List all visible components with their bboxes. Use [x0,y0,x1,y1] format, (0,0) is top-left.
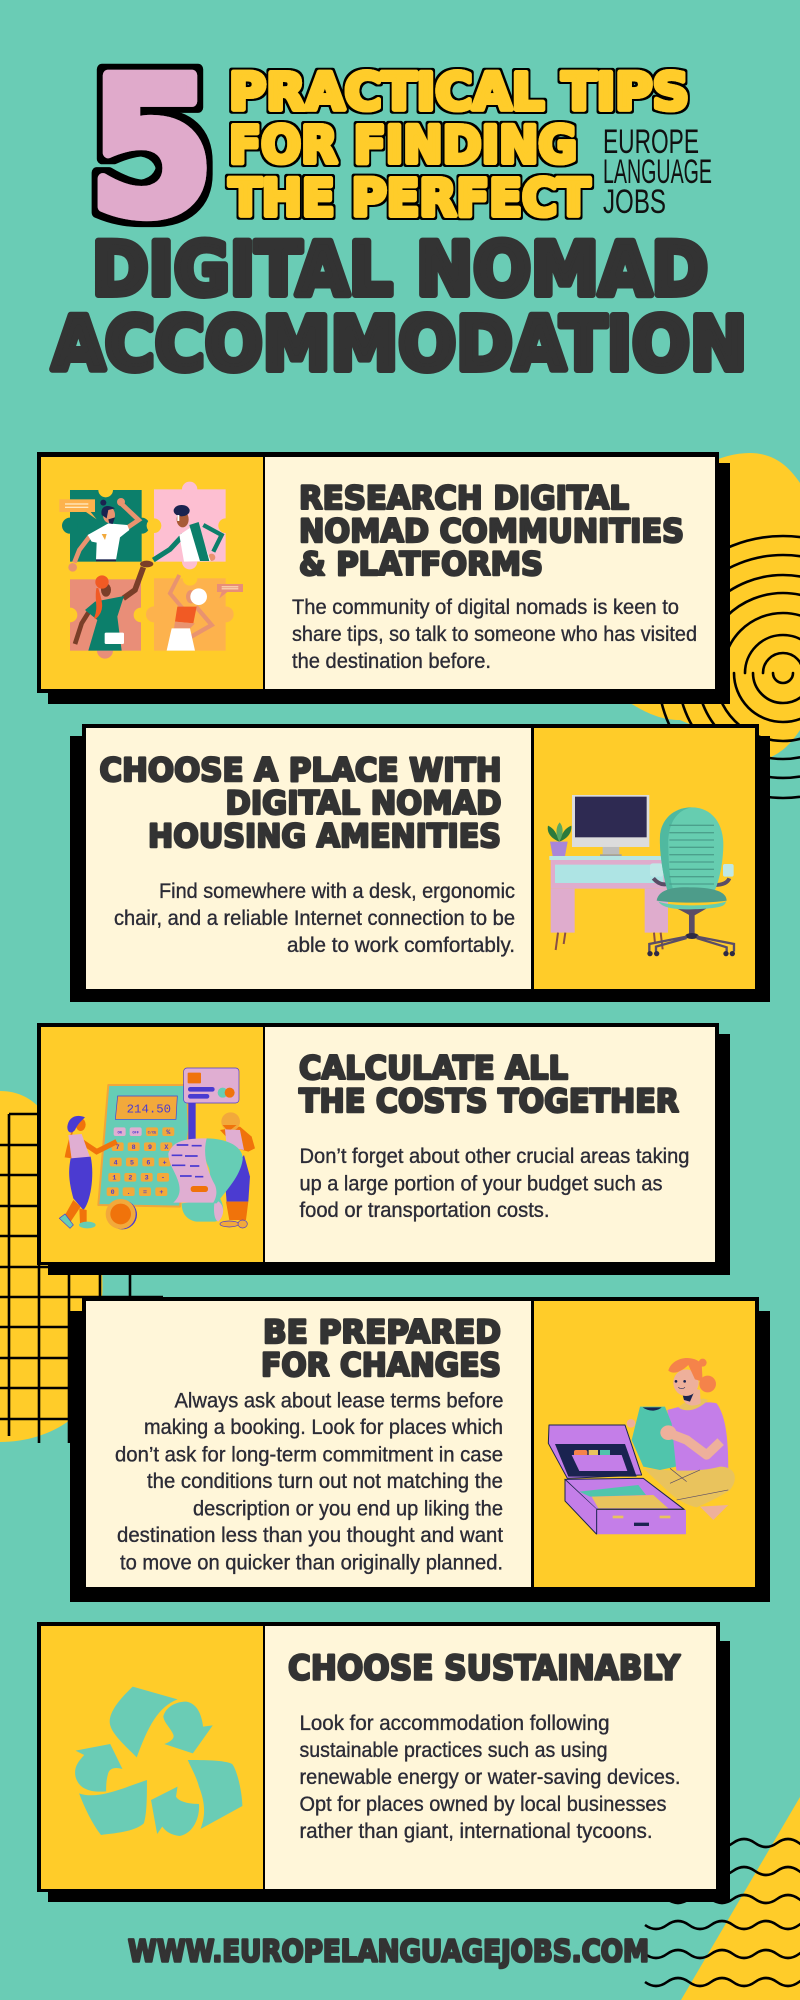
body text 1 [292,596,697,673]
heading 1 [299,479,684,583]
icon: calculator and people: 4 [114,1158,118,1166]
yellow headline: THE PERFECT [229,168,590,228]
icon: calculator and people: + [163,1158,167,1166]
body text 4: to move on quicker than originally planned. [120,1552,503,1574]
body text 4: making a booking. Look for places which [144,1416,503,1439]
icon: calculator and people: + [159,1188,163,1196]
heading 2 [100,751,502,855]
icon: puzzle people [59,482,243,659]
body text 4: Always ask about lease terms before [174,1390,504,1412]
heading 3: CALCULATE ALL [299,1049,568,1087]
icon: calculator and people: . [127,1188,131,1196]
panel 3: calculate costs [37,1023,730,1275]
heading 1: NOMAD COMMUNITIES [299,512,684,550]
icon: calculator and people: 5 [130,1158,134,1166]
logo: Europe Language Jobs: EUROPE [603,123,699,161]
main heading: ACCOMMODATION [52,302,747,388]
body text 5: Look for accommodation following [300,1712,610,1735]
body text 2: chair, and a reliable Internet connection to be [114,907,515,930]
body text 2 [114,880,515,957]
icon: calculator and people: 214.50 [127,1102,171,1116]
heading 3: THE COSTS TOGETHER [299,1082,679,1120]
icon: calculator and people: 2 [128,1174,132,1182]
icon: calculator and people: 1 [112,1174,116,1182]
body text 5: Opt for places owned by local businesses [300,1793,666,1816]
icon: recycle arrows [75,1687,242,1836]
icon: woman packing suitcase [548,1358,735,1534]
body text 5: sustainable practices such as using [300,1739,608,1762]
body text 1: The community of digital nomads is keen to [292,596,679,619]
heading 2: HOUSING AMENITIES [148,817,501,855]
heading 1: RESEARCH DIGITAL [299,479,629,517]
main heading [52,228,747,388]
main heading: DIGITAL NOMAD [92,228,708,312]
title block [52,38,747,388]
heading 4: FOR CHANGES [261,1346,501,1384]
body text 2: Find somewhere with a desk, ergonomic [159,880,515,903]
icon: calculator and people: 3 [145,1174,149,1182]
panel 1: research communities [37,452,730,704]
icon: desk and chair [548,795,735,956]
icon: calculator and people: 6 [146,1158,150,1166]
logo: Europe Language Jobs: LANGUAGE [603,153,712,191]
body text 2: able to work comfortably. [287,934,515,957]
decoration: yellow blob with grid [0,1091,163,1443]
body text 4: description or you end up liking the [193,1498,503,1520]
body text 4: the conditions turn out not matching the [147,1470,503,1493]
body text 3 [300,1145,690,1222]
logo: Europe Language Jobs: JOBS [603,183,666,221]
body text 1: share tips, so talk to someone who has visited [292,623,697,646]
logo: Europe Language Jobs [603,123,712,221]
icon: calculator and people: = [143,1188,147,1196]
body text 4: destination less than you thought and want [117,1524,503,1547]
icon: calculator and people: 7 [116,1143,120,1151]
footer url: WWW.EUROPELANGUAGEJOBS.COM [128,1934,649,1970]
heading 4: BE PREPARED [263,1313,501,1351]
icon: calculator and people: 0 [111,1188,115,1196]
icon: calculator and people: 9 [148,1143,152,1151]
heading 4 [261,1313,501,1384]
heading 2: CHOOSE A PLACE WITH [100,751,502,789]
panel 5: choose sustainably [37,1622,730,1902]
heading 5: CHOOSE SUSTAINABLY [288,1648,680,1688]
body text 4: don’t ask for long-term commitment in case [115,1444,503,1466]
body text 4 [115,1390,504,1574]
icon: calculator and people: X [164,1143,168,1151]
decoration: yellow corner with waves [645,1797,800,2000]
body text 5: rather than giant, international tycoons. [300,1820,652,1843]
heading 1: & PLATFORMS [299,545,543,583]
decoration: yellow blob with spiral [630,453,800,798]
panel 4: prepared for changes [70,1297,770,1602]
icon: calculator and people: 8 [132,1143,136,1151]
body text 1: the destination before. [292,650,491,673]
body text 5 [300,1712,680,1843]
yellow headline: PRACTICAL TIPS [229,62,689,122]
body text 3: Don’t forget about other crucial areas taking [300,1145,690,1168]
icon: calculator and people: - [161,1174,165,1182]
icon: calculator and people [59,1068,255,1229]
heading 3 [299,1049,679,1120]
panel 2: housing amenities [70,724,770,1002]
yellow headline: FOR FINDING [229,116,577,174]
icon: calculator and people: % [166,1128,170,1136]
yellow headline [229,62,689,228]
icon: calculator and people: C/CE [148,1130,157,1135]
body text 3: up a large portion of your budget such as [300,1172,662,1196]
body text 5: renewable energy or water-saving devices. [300,1766,680,1789]
icon: calculator and people: ON [117,1131,122,1135]
big number 5: 5 [89,38,214,258]
icon: calculator and people: OFF [132,1131,139,1135]
heading 2: DIGITAL NOMAD [226,784,502,822]
body text 3: food or transportation costs. [300,1199,550,1222]
